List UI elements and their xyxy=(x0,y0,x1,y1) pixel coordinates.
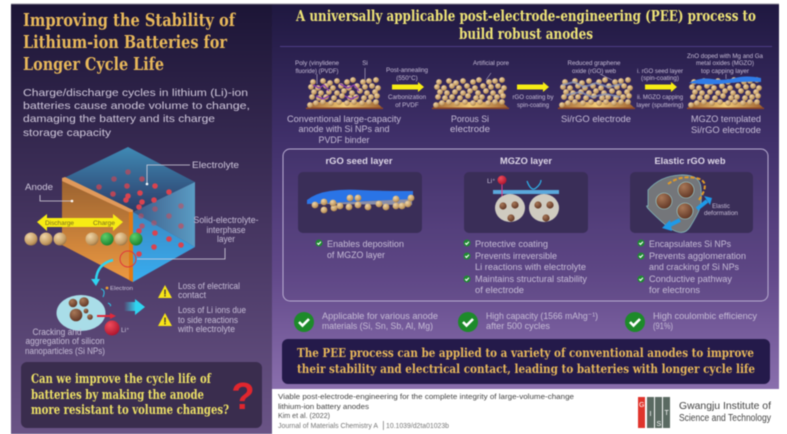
charge and discharge double arrow: Charge xyxy=(93,220,115,227)
nanoparticle caption: Cracking and xyxy=(32,327,82,338)
arrow: post-annealing: Carbonization xyxy=(388,94,427,101)
solid-electrolyte-interphase label: interphase xyxy=(206,225,246,236)
column: elastic rGO web: Elastic rGO web xyxy=(654,156,726,167)
panel: left background xyxy=(11,4,272,434)
process step 4: MGZO templated electrode: MGZO templated xyxy=(691,114,761,125)
panel: right background xyxy=(272,4,779,389)
GIST logo xyxy=(638,397,771,428)
process step 4: MGZO templated electrode: top capping layer xyxy=(701,68,749,75)
cracked silicon nanoparticles: Li⁺ xyxy=(121,327,130,334)
process step 2: porous electrode: electrode xyxy=(450,124,490,135)
arrow: rGO coating xyxy=(512,82,554,109)
cyan result arrow xyxy=(124,299,145,315)
benefit: applicable materials xyxy=(294,311,438,332)
benefit: coulombic efficiency: (91%) xyxy=(653,321,673,332)
conclusion callout xyxy=(282,339,770,384)
process step 1: conventional anode: PVDF binder xyxy=(318,135,370,146)
arrow: post-annealing: of PVDF xyxy=(395,102,419,109)
column: rGO seed layer xyxy=(298,156,422,261)
left intro text xyxy=(23,87,250,139)
arrow: post-annealing: (550°C) xyxy=(396,75,418,82)
curved cyan arrow xyxy=(91,260,113,286)
column: elastic rGO web: Prevents agglomeration xyxy=(649,251,746,262)
arrow: seed and capping layers: (spin-coating) xyxy=(641,75,679,82)
process step 4: MGZO templated electrode: Si/rGO electrode xyxy=(691,125,761,136)
warning: loss of Li ions xyxy=(158,305,246,335)
question callout: batteries by making the anode xyxy=(31,388,204,403)
column: MGZO layer: of electrode xyxy=(475,285,524,296)
warning: loss of Li ions: with electrolyte xyxy=(177,324,235,335)
citation: Viable post-electrode-engineering for the complete integrity of large-volume-change xyxy=(278,392,574,401)
arrow: seed and capping layers xyxy=(636,68,684,109)
nanoparticle caption xyxy=(25,327,105,357)
left intro text: batteries cause anode volume to change, xyxy=(23,100,250,112)
panel: layer details xyxy=(283,149,768,301)
nanoparticle caption: aggregation of silicon xyxy=(26,336,104,347)
right title xyxy=(295,7,756,43)
process step 1: conventional anode: fluoride) (PVDF) xyxy=(296,68,338,75)
warning: loss of electrical contact: Loss of electrical xyxy=(178,281,240,292)
warning: loss of Li ions: Loss of Li ions due xyxy=(178,305,246,316)
process step 1: conventional anode: anode with Si NPs and xyxy=(298,124,390,135)
column: elastic rGO web: Encapsulates Si NPs xyxy=(649,239,731,250)
left intro text: storage capacity xyxy=(23,127,112,139)
process step 3: Si/rGO electrode: oxide (rGO) web xyxy=(572,68,617,75)
column: MGZO layer: Protective coating xyxy=(475,239,548,250)
arrow: rGO coating: spin-coating xyxy=(517,102,550,109)
left title xyxy=(23,10,236,75)
question callout xyxy=(21,362,262,428)
anode label: Anode xyxy=(25,182,53,193)
column: rGO seed layer: of MGZO layer xyxy=(327,250,386,261)
left title: Lithium-ion Batteries for xyxy=(23,32,227,53)
process step 3: Si/rGO electrode: Si/rGO electrode xyxy=(561,114,631,125)
citation: lithium-ion battery anodes xyxy=(278,402,369,411)
solid-electrolyte-interphase label xyxy=(120,215,258,267)
warning: loss of Li ions: to side reactions xyxy=(178,315,238,326)
warning: loss of electrical contact: contact xyxy=(178,290,206,301)
question callout: ? xyxy=(231,376,255,418)
column: MGZO layer: Li reactions with electrolyte xyxy=(475,262,586,273)
benefit: high capacity xyxy=(458,311,598,332)
electrolyte label xyxy=(146,160,239,185)
solid-electrolyte-interphase label: Solid-electrolyte- xyxy=(194,215,258,226)
silicon and lithium-silicon particles xyxy=(24,232,142,246)
process step 2: porous electrode: Artificial pore xyxy=(473,60,510,67)
solid-electrolyte-interphase label: layer xyxy=(217,234,236,245)
arrow: post-annealing xyxy=(386,67,429,109)
column: rGO seed layer: Enables deposition xyxy=(327,239,404,250)
GIST logo: S xyxy=(656,421,662,428)
battery cube diagram xyxy=(62,147,195,282)
process step 4: MGZO templated electrode: metal oxides (MGZO) xyxy=(696,60,754,67)
arrow: seed and capping layers: ii. MGZO capping xyxy=(637,94,684,101)
citation xyxy=(278,392,574,430)
left title: Improving the Stability of xyxy=(23,10,236,31)
cracked silicon nanoparticles: Electron xyxy=(110,286,133,292)
question callout: Can we improve the cycle life of xyxy=(31,372,212,387)
charge and discharge double arrow: Discharge xyxy=(45,220,74,227)
column: MGZO layer xyxy=(464,156,588,296)
column: rGO seed layer: rGO seed layer xyxy=(326,156,393,167)
left intro text: Charge/discharge cycles in lithium (Li)-ion xyxy=(23,87,248,99)
column: MGZO layer: Li⁺ xyxy=(487,178,496,185)
arrow: seed and capping layers: layer (sputtering) xyxy=(636,102,684,109)
process step 1: conventional anode: Poly (vinylidene xyxy=(295,60,340,67)
column: MGZO layer: MGZO layer xyxy=(500,156,552,167)
column: elastic rGO web: for electrons xyxy=(649,285,700,296)
GIST logo: Science and Technology xyxy=(679,413,771,424)
column: elastic rGO web: and cracking of Si NPs xyxy=(649,262,739,273)
process step 1: conventional anode xyxy=(287,60,401,146)
benefit: high capacity: High capacity (1566 mAhg⁻¹) xyxy=(486,311,598,322)
arrow: seed and capping layers: i. rGO seed layer xyxy=(637,68,683,75)
GIST logo: I xyxy=(650,411,652,418)
process step 2: porous electrode: Porous Si xyxy=(451,114,489,125)
left intro text: damaging the battery and its charge xyxy=(23,113,215,125)
arrow: rGO coating: rGO coating by xyxy=(512,94,554,101)
citation: Journal of Materials Chemistry A xyxy=(278,421,379,430)
citation: 10.1039/d2ta01023b xyxy=(386,421,449,430)
process step 1: conventional anode: Si xyxy=(362,60,368,67)
charge and discharge double arrow xyxy=(37,214,123,231)
benefit: applicable materials: Applicable for various anode xyxy=(322,311,438,322)
column: elastic rGO web: Elastic xyxy=(712,204,730,210)
arrow: post-annealing: Post-annealing xyxy=(386,67,429,74)
column: elastic rGO web xyxy=(630,156,753,296)
column: elastic rGO web: deformation xyxy=(704,211,738,217)
GIST logo: Gwangju Institute of xyxy=(679,401,771,412)
column: MGZO layer: Prevents irreversible xyxy=(475,251,557,262)
column: MGZO layer: Maintains structural stability xyxy=(475,274,587,285)
process step 4: MGZO templated electrode xyxy=(687,53,764,136)
process step 4: MGZO templated electrode: ZnO doped with Mg and Ga xyxy=(687,53,764,60)
GIST logo: G xyxy=(639,402,644,409)
question callout: more resistant to volume changes? xyxy=(31,403,229,418)
process step 1: conventional anode: Conventional large-capacity xyxy=(287,114,401,125)
column: elastic rGO web: Conductive pathway xyxy=(649,274,732,285)
nanoparticle caption: nanoparticles (Si NPs) xyxy=(25,346,105,357)
left title: Longer Cycle Life xyxy=(23,54,164,75)
warning: loss of electrical contact xyxy=(158,281,240,301)
cracked silicon nanoparticles xyxy=(56,286,133,336)
anode label xyxy=(25,182,73,202)
right title: build robust anodes xyxy=(459,25,593,43)
process step 3: Si/rGO electrode: Reduced graphene xyxy=(568,60,621,67)
benefit: coulombic efficiency: High coulombic efficiency xyxy=(653,311,757,322)
process step 3: Si/rGO electrode xyxy=(558,60,635,125)
process step 2: porous electrode xyxy=(432,60,510,135)
citation: Kim et al. (2022) xyxy=(278,411,330,420)
benefit: high capacity: after 500 cycles xyxy=(486,321,550,332)
GIST logo: T xyxy=(664,410,670,417)
electrolyte label: Electrolyte xyxy=(192,160,239,171)
benefit: applicable materials: materials (Si, Sn, Sb, Al, Mg) xyxy=(322,321,433,332)
benefit: coulombic efficiency xyxy=(625,311,757,332)
